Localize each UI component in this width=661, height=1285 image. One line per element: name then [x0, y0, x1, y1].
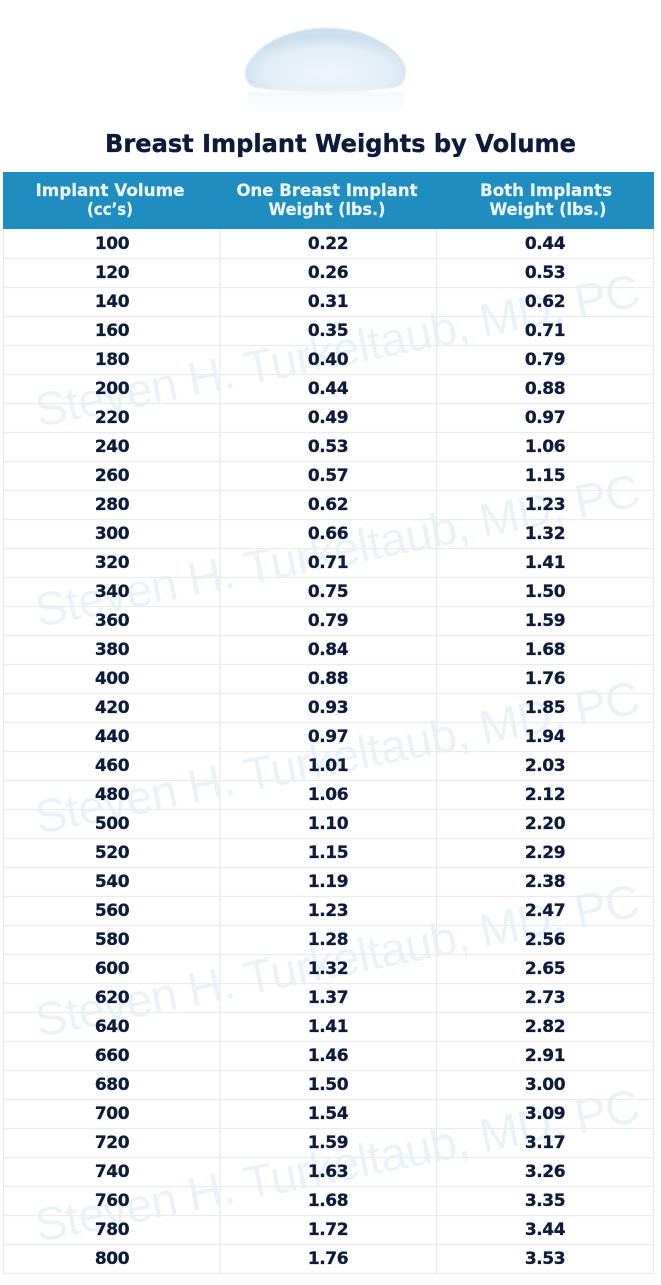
table rows: 1.85 — [525, 698, 565, 718]
table rows: 3.53 — [525, 1249, 565, 1269]
table rows: 1.68 — [308, 1191, 348, 1211]
table rows: 160 — [95, 321, 130, 341]
table rows: 120 — [95, 263, 130, 283]
table rows: 0.84 — [308, 640, 349, 660]
table rows: 1.46 — [308, 1046, 348, 1066]
table rows: 1.01 — [308, 756, 348, 776]
table rows: 0.75 — [308, 582, 348, 602]
table rows: 3.35 — [525, 1191, 565, 1211]
table rows: 240 — [95, 437, 130, 457]
table rows: 680 — [95, 1075, 130, 1095]
table rows: 3.44 — [525, 1220, 566, 1240]
table rows: 0.71 — [525, 321, 565, 341]
table rows: 0.97 — [525, 408, 565, 428]
table rows: 0.93 — [308, 698, 348, 718]
table rows: 2.47 — [525, 901, 565, 921]
table rows: 440 — [95, 727, 130, 747]
table rows: 340 — [95, 582, 130, 602]
table header: Weight (lbs.) — [490, 200, 606, 219]
table rows: 1.10 — [308, 814, 349, 834]
table rows: 0.35 — [308, 321, 348, 341]
table rows: 740 — [95, 1162, 130, 1182]
table rows: 620 — [95, 988, 130, 1008]
table rows: 760 — [95, 1191, 130, 1211]
table rows — [95, 234, 566, 1269]
table rows: 1.76 — [525, 669, 565, 689]
table rows: 0.62 — [525, 292, 565, 312]
table rows: 1.28 — [308, 930, 348, 950]
table rows: 520 — [95, 843, 130, 863]
table rows: 2.56 — [525, 930, 565, 950]
table rows: 0.44 — [308, 379, 349, 399]
table rows: 800 — [95, 1249, 130, 1269]
table rows: 400 — [95, 669, 130, 689]
watermark: Steven H. Turkeltaub, MD, PC — [31, 670, 644, 844]
table rows: 2.65 — [525, 959, 565, 979]
table rows: 200 — [95, 379, 130, 399]
table rows: 0.40 — [308, 350, 349, 370]
table rows: 1.06 — [525, 437, 565, 457]
table rows: 0.53 — [525, 263, 565, 283]
watermark: Steven H. Turkeltaub, MD, PC — [31, 263, 644, 437]
table rows: 660 — [95, 1046, 130, 1066]
table rows: 0.57 — [308, 466, 348, 486]
table rows: 0.66 — [308, 524, 348, 544]
table rows: 540 — [95, 872, 130, 892]
table rows: 0.97 — [308, 727, 348, 747]
table rows: 1.50 — [308, 1075, 349, 1095]
table rows: 2.38 — [525, 872, 565, 892]
table header: One Breast Implant — [236, 181, 418, 200]
table rows: 1.19 — [308, 872, 348, 892]
table rows: 280 — [95, 495, 130, 515]
table rows: 560 — [95, 901, 130, 921]
table rows: 1.15 — [525, 466, 565, 486]
table rows: 700 — [95, 1104, 130, 1124]
watermark: Steven H. Turkeltaub, MD, PC — [31, 463, 644, 637]
table rows: 2.20 — [525, 814, 566, 834]
table rows: 2.03 — [525, 756, 565, 776]
table rows: 1.32 — [525, 524, 565, 544]
table rows: 0.53 — [308, 437, 348, 457]
table rows: 0.71 — [308, 553, 348, 573]
table rows: 180 — [95, 350, 130, 370]
table rows: 0.49 — [308, 408, 348, 428]
table rows: 1.59 — [525, 611, 565, 631]
table rows: 3.09 — [525, 1104, 565, 1124]
table rows: 360 — [95, 611, 130, 631]
table rows: 1.68 — [525, 640, 565, 660]
table rows: 600 — [95, 959, 130, 979]
table rows: 780 — [95, 1220, 130, 1240]
table rows: 2.91 — [525, 1046, 565, 1066]
watermark: Steven H. Turkeltaub, MD, PC — [31, 1078, 644, 1252]
table header: Weight (lbs.) — [268, 200, 386, 219]
table rows: 3.17 — [525, 1133, 565, 1153]
watermark — [31, 263, 644, 1252]
table header: (cc’s) — [87, 200, 133, 219]
table rows: 1.23 — [525, 495, 565, 515]
table rows: 0.62 — [308, 495, 348, 515]
table rows: 0.22 — [308, 234, 348, 254]
icon: breast implant — [245, 28, 406, 116]
table header: Implant Volume — [36, 181, 184, 200]
table rows: 0.88 — [525, 379, 565, 399]
table rows: 380 — [95, 640, 130, 660]
table rows: 1.06 — [308, 785, 348, 805]
table rows: 100 — [95, 234, 130, 254]
table rows: 140 — [95, 292, 130, 312]
table rows: 3.00 — [525, 1075, 566, 1095]
table rows: 580 — [95, 930, 130, 950]
table rows: 1.63 — [308, 1162, 348, 1182]
table rows: 480 — [95, 785, 130, 805]
table rows: 500 — [95, 814, 130, 834]
table rows: 1.37 — [308, 988, 348, 1008]
table rows: 1.54 — [308, 1104, 349, 1124]
table rows: 0.31 — [308, 292, 348, 312]
table rows: 2.82 — [525, 1017, 565, 1037]
table rows: 0.44 — [525, 234, 566, 254]
table rows: 320 — [95, 553, 130, 573]
table rows: 3.26 — [525, 1162, 565, 1182]
title: Breast Implant Weights by Volume — [105, 129, 576, 158]
table rows: 1.32 — [308, 959, 348, 979]
table rows: 1.41 — [308, 1017, 348, 1037]
table rows: 260 — [95, 466, 130, 486]
table rows: 2.73 — [525, 988, 565, 1008]
table rows: 0.79 — [308, 611, 348, 631]
table header — [3, 172, 654, 229]
table rows: 720 — [95, 1133, 130, 1153]
table rows: 1.76 — [308, 1249, 348, 1269]
table rows: 1.23 — [308, 901, 348, 921]
table rows: 1.94 — [525, 727, 566, 747]
table rows: 1.15 — [308, 843, 348, 863]
table rows: 420 — [95, 698, 130, 718]
table rows: 0.79 — [525, 350, 565, 370]
table rows: 1.41 — [525, 553, 565, 573]
table rows: 220 — [95, 408, 130, 428]
table rows: 460 — [95, 756, 130, 776]
table rows: 2.12 — [525, 785, 565, 805]
table rows: 640 — [95, 1017, 130, 1037]
table rows: 2.29 — [525, 843, 565, 863]
table rows: 1.72 — [308, 1220, 348, 1240]
table rows: 0.88 — [308, 669, 348, 689]
table rows: 0.26 — [308, 263, 348, 283]
table rows: 1.59 — [308, 1133, 348, 1153]
table rows: 1.50 — [525, 582, 566, 602]
watermark: Steven H. Turkeltaub, MD, PC — [31, 873, 644, 1047]
table rows: 300 — [95, 524, 130, 544]
table header: Both Implants — [480, 181, 612, 200]
